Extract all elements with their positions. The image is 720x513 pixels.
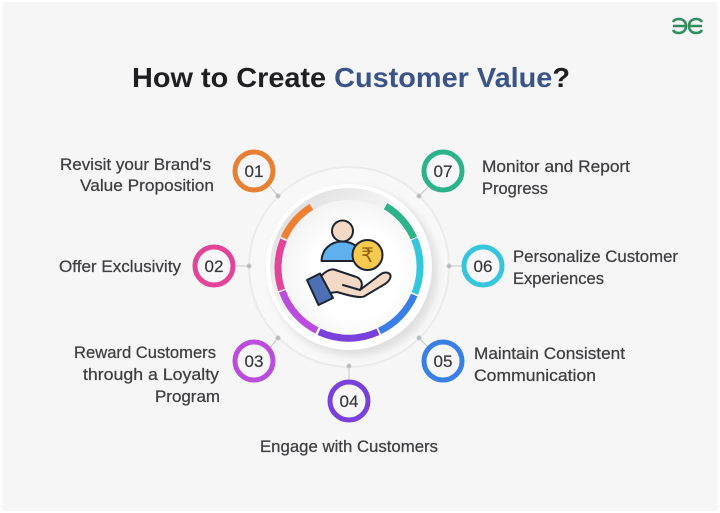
step 01 badge — [235, 152, 273, 190]
icon: hand — [321, 269, 391, 297]
label 03: Reward Customers — [74, 344, 216, 362]
label 05: Maintain Consistent — [474, 345, 625, 363]
label 07: Progress — [482, 180, 548, 198]
step 05 badge: 05 — [434, 352, 452, 371]
step 06 badge: 06 — [474, 257, 492, 276]
label 02: Offer Exclusivity — [59, 258, 182, 276]
step 02 badge: 02 — [205, 257, 223, 276]
central wheel — [249, 167, 449, 367]
logo: GeeksforGeeks — [673, 19, 702, 33]
label 03: through a Loyalty — [83, 366, 220, 384]
icon: hand holding customer and rupee coin — [307, 220, 391, 305]
step 04 badge: 04 — [340, 392, 358, 411]
step 05 badge — [424, 342, 462, 380]
step 03 badge — [235, 342, 273, 380]
label 07: Monitor and Report — [482, 158, 630, 176]
label 06: Personalize Customer — [513, 248, 679, 266]
rupee symbol: ₹ — [361, 243, 374, 267]
label 01: Value Proposition — [80, 177, 214, 195]
icon: customer body — [322, 242, 361, 261]
title: How to Create Customer Value? — [132, 62, 570, 93]
step 06 badge — [464, 247, 502, 285]
step 03 badge: 03 — [245, 352, 263, 371]
icon: sleeve — [307, 274, 333, 305]
step 02 badge — [195, 247, 233, 285]
step 07 badge: 07 — [434, 162, 452, 181]
connector dots — [234, 184, 463, 379]
label 05: Communication — [474, 367, 596, 385]
icon: customer head — [332, 220, 353, 242]
label 04: Engage with Customers — [260, 438, 438, 456]
label 01: Revisit your Brand's — [60, 156, 211, 174]
ring segments — [278, 206, 420, 338]
icon: rupee coin — [352, 240, 382, 270]
label 06: Experiences — [513, 270, 604, 288]
step 07 badge — [424, 152, 462, 190]
step 01 badge: 01 — [245, 162, 263, 181]
label 03: Program — [155, 388, 220, 406]
step 04 badge — [330, 382, 368, 420]
